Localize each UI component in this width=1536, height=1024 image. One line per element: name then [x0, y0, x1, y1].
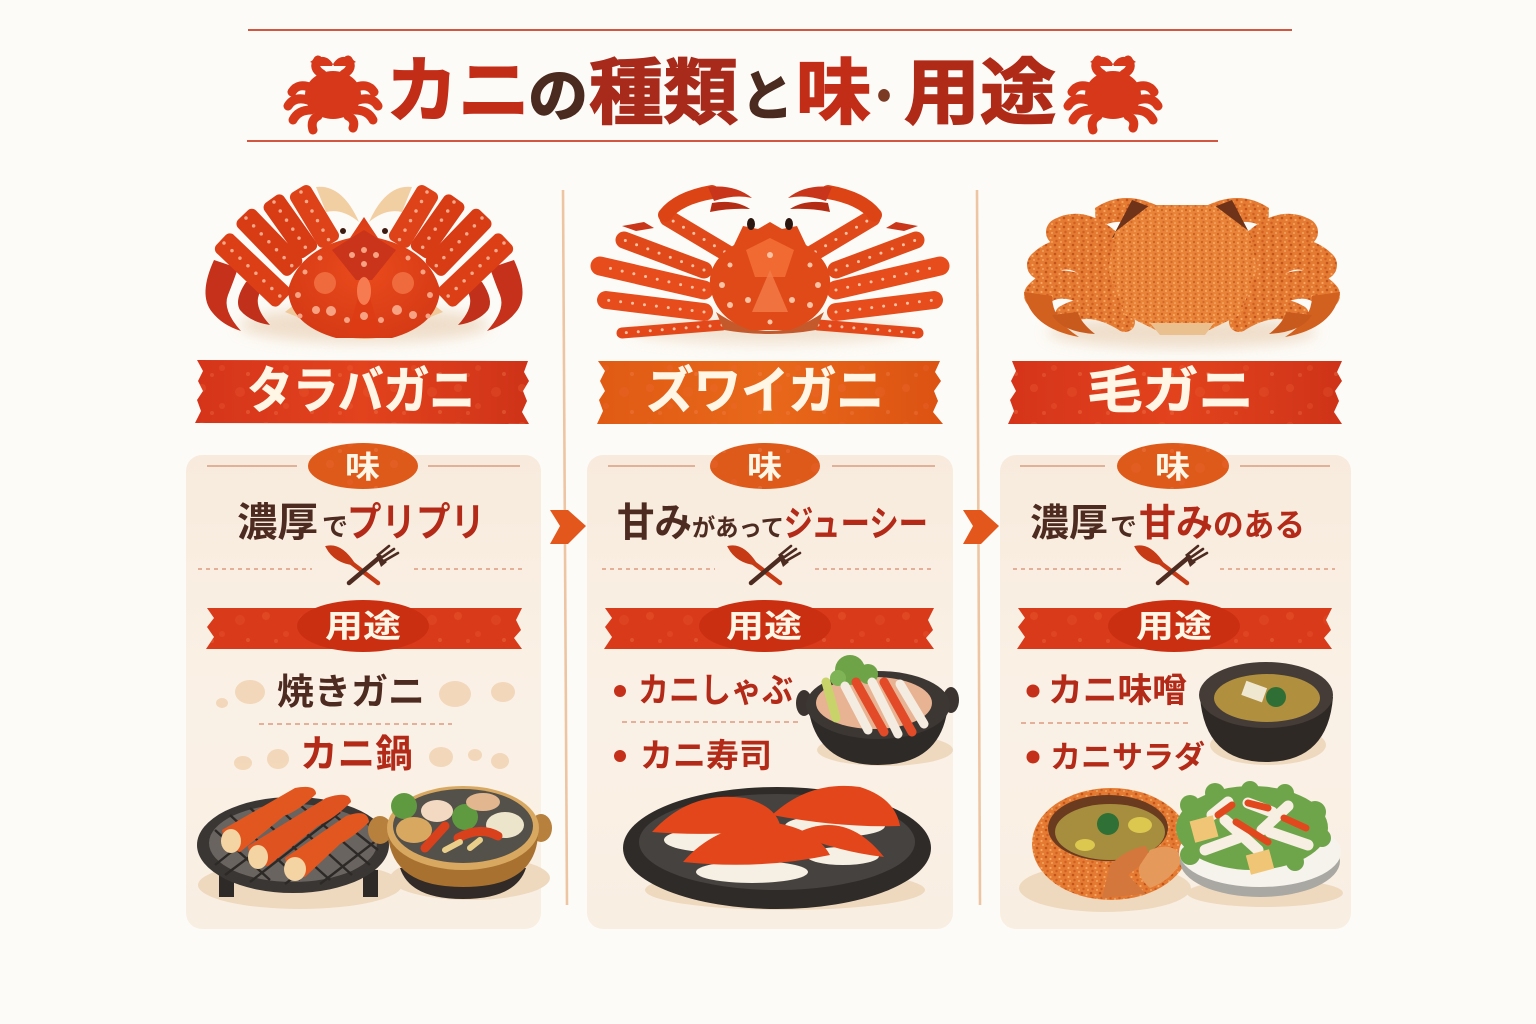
taste text: 甘み [617, 501, 692, 545]
icon: title crab left [288, 57, 378, 130]
illustration: crab hotpot [368, 786, 552, 900]
title [386, 52, 1056, 134]
taste text: 甘み [1139, 503, 1213, 545]
uses list: カニ鍋 [300, 734, 413, 776]
uses list: カニ寿司 [640, 737, 772, 774]
arrow 1 [550, 510, 586, 544]
icon: title crab right [1068, 57, 1158, 130]
uses list [614, 672, 800, 774]
divider right [977, 190, 980, 905]
panel: zuwai [587, 361, 959, 929]
divider left [563, 190, 567, 905]
arrow 2 [963, 510, 999, 544]
title: と [741, 67, 793, 127]
taste text [1030, 503, 1305, 545]
uses label [604, 600, 934, 652]
taste text [617, 501, 928, 545]
taste label: 味 [345, 450, 380, 485]
panel: kegani [1000, 361, 1351, 929]
uses label: 用途 [1136, 608, 1212, 644]
ribbon: taraba name [195, 360, 529, 424]
title: ・ [864, 73, 904, 122]
uses list: カニしゃぶ [638, 672, 793, 710]
uses label: 用途 [325, 608, 401, 644]
title: 用途 [904, 54, 1056, 134]
uses list: カニサラダ [1050, 740, 1205, 775]
uses label [206, 600, 522, 652]
panel: taraba [186, 360, 552, 929]
taste label: 味 [747, 450, 782, 485]
ribbon: kegani name: 毛ガニ [1087, 363, 1254, 419]
illustration: king crab [205, 183, 523, 343]
taste text: で [322, 512, 348, 542]
taste text: 濃厚 [1030, 503, 1108, 545]
taste text: で [1110, 512, 1137, 542]
taste text: があって [692, 514, 784, 542]
illustration: snow crab [600, 186, 940, 344]
taste label [207, 443, 520, 489]
ribbon: taraba name: タラバガニ [247, 363, 475, 419]
uses list [259, 671, 452, 776]
taste text: 濃厚 [237, 501, 318, 545]
illustration: crab shell gratin [1019, 788, 1191, 912]
taste text: のある [1213, 507, 1305, 543]
decorative blobs [216, 680, 515, 770]
title: の [528, 64, 588, 129]
title area [247, 30, 1292, 141]
uses list [1021, 672, 1205, 775]
uses label: 用途 [726, 608, 802, 644]
taste label [608, 443, 935, 489]
illustration: crab miso bowl [1199, 662, 1333, 765]
icon: spoon and fork [729, 546, 800, 583]
icon: spoon and fork [327, 546, 398, 583]
illustration: crab salad [1176, 781, 1343, 907]
illustration: hairy crab [1024, 198, 1340, 348]
taste text [237, 501, 485, 545]
taste text: プリプリ [347, 501, 485, 545]
illustration: grilled crab on grill [197, 787, 402, 909]
taste label: 味 [1155, 450, 1190, 485]
illustration: crab shabu pot [796, 655, 959, 766]
uses list: 焼きガニ [277, 671, 425, 712]
icon: spoon and fork [1136, 546, 1207, 583]
illustration: crab sushi plate [623, 786, 931, 910]
taste text: ジューシー [784, 503, 928, 544]
uses list: カニ味噌 [1048, 672, 1187, 710]
title: 味 [796, 54, 871, 134]
ribbon: zuwai name: ズワイガニ [646, 363, 884, 419]
title: カニ [386, 52, 530, 132]
title: 種類 [589, 54, 738, 134]
ribbon: kegani name [1008, 361, 1342, 424]
taste label [1020, 443, 1330, 489]
ribbon: zuwai name [597, 361, 943, 424]
uses label [1017, 600, 1332, 652]
